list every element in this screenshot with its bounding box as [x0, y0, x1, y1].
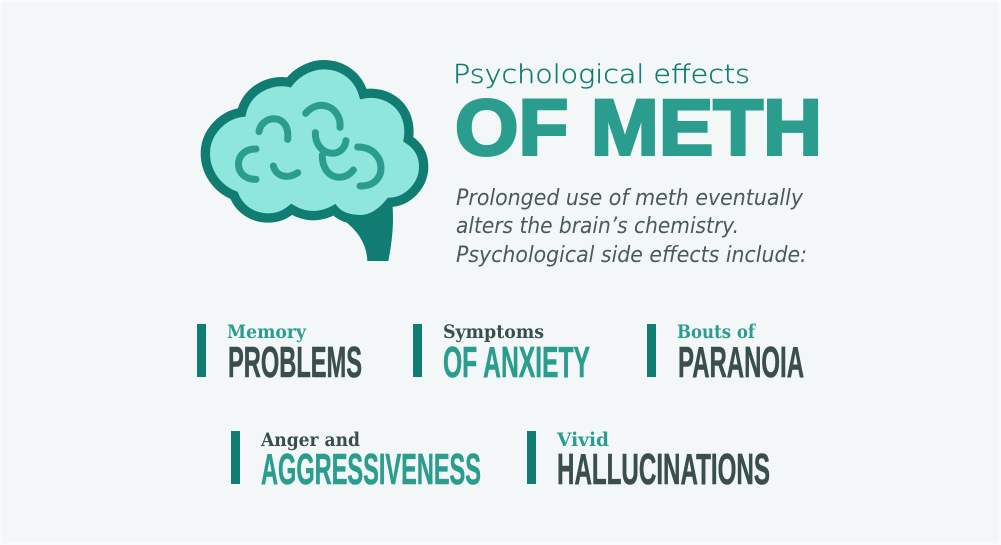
effect: symptoms of anxiety [413, 321, 590, 387]
effect: symptoms of anxiety: Symptoms [443, 321, 544, 343]
brain folds [238, 105, 381, 186]
intro paragraph: alters the brain’s chemistry. [456, 214, 739, 239]
effect: memory problems: Memory [227, 321, 307, 343]
effect: symptoms of anxiety: OF ANXIETY [443, 339, 590, 387]
effect: anger and aggressiveness [231, 429, 481, 494]
intro paragraph: Psychological side effects include: [456, 243, 807, 268]
effect: vivid hallucinations: Vivid [556, 429, 609, 451]
brain outline and fill [205, 65, 424, 220]
brain stem [333, 203, 393, 261]
icon: brain [205, 65, 424, 261]
effect: bouts of paranoia: PARANOIA [678, 339, 804, 387]
effect: vivid hallucinations: HALLUCINATIONS [557, 446, 770, 494]
effect: memory problems [197, 321, 362, 387]
intro paragraph [456, 186, 807, 268]
effect: anger and aggressiveness: Anger and [260, 429, 360, 451]
effect: vivid hallucinations [527, 429, 770, 494]
title: OF METH [455, 82, 822, 172]
effect: memory problems: PROBLEMS [228, 339, 362, 387]
subtitle: Psychological effects [453, 60, 750, 90]
intro paragraph: Prolonged use of meth eventually [456, 186, 804, 211]
effect: bouts of paranoia [647, 321, 804, 387]
effect: anger and aggressiveness: AGGRESSIVENESS [261, 446, 481, 494]
effect: bouts of paranoia: Bouts of [677, 321, 757, 343]
